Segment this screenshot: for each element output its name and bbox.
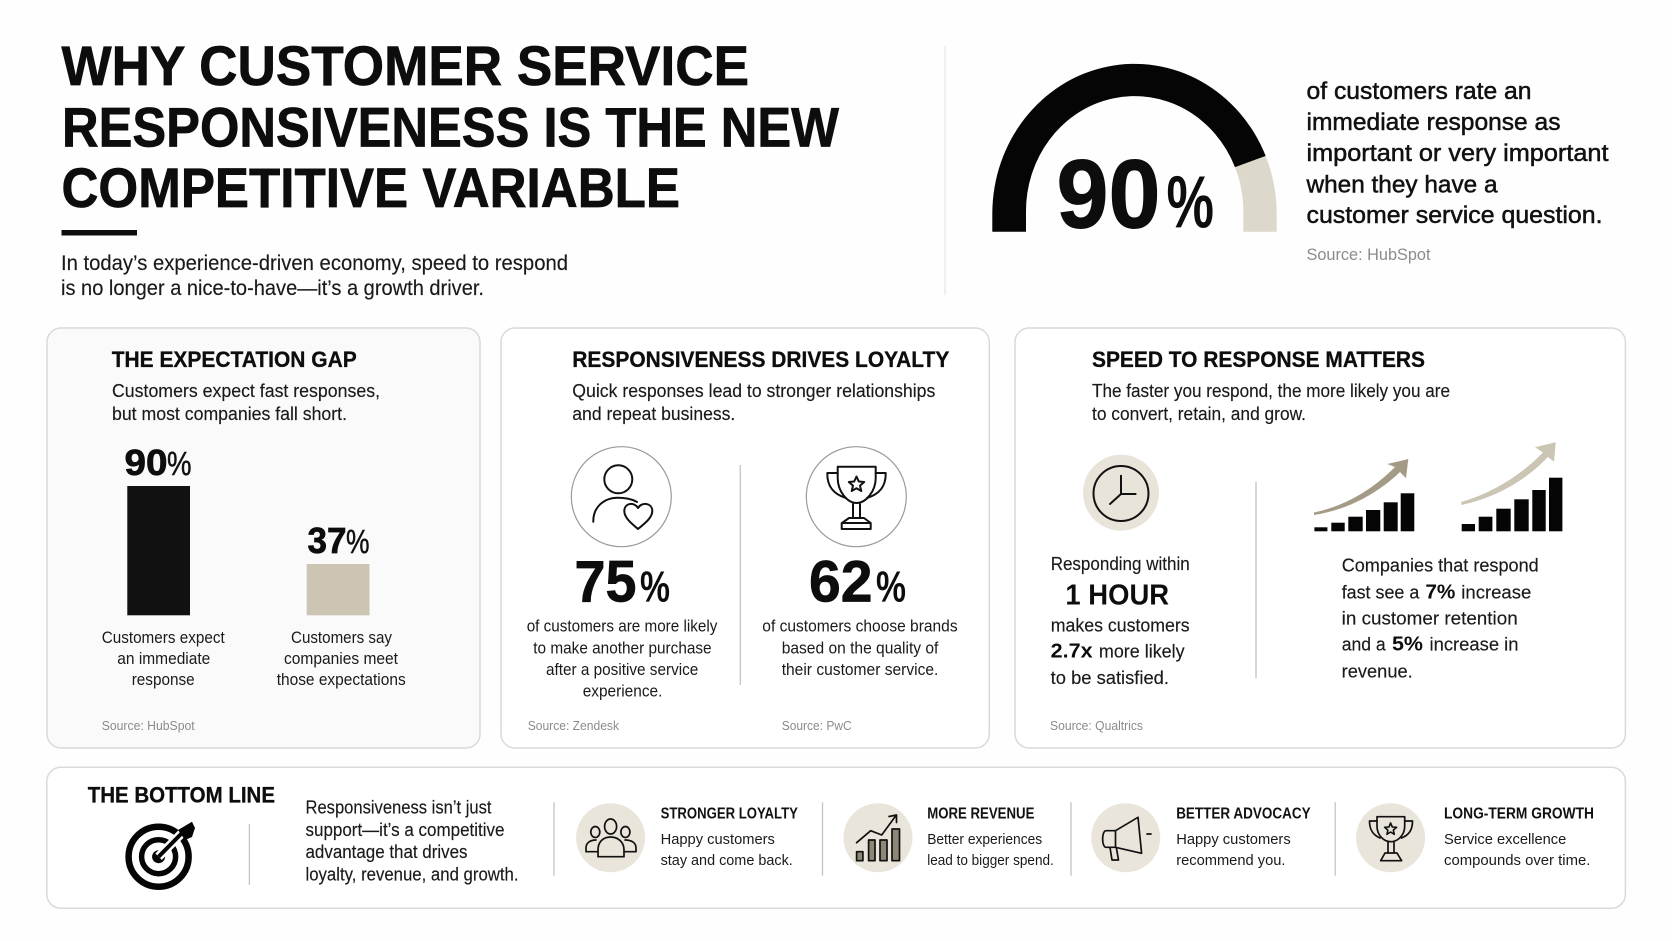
gauge statement: when they have a [1305,172,1498,198]
panel intro: and repeat business. [572,404,735,424]
icon: person with heart [571,447,671,547]
companies statement: increase [1461,582,1531,602]
chart: retention growth bars with arrow [1314,459,1414,531]
chart: revenue growth bars with arrow [1461,442,1562,531]
benefit: stronger loyalty: STRONGER LOYALTY [661,805,798,822]
title: WHY CUSTOMER SERVICE [62,35,749,97]
caption: 62 percent: of customers choose brands [762,618,958,636]
bar: 90 percent: 90 [124,442,168,483]
source: Qualtrics: Source: Qualtrics [1050,718,1143,733]
benefit: long-term growth: Service excellence [1444,831,1566,848]
caption: expect: an immediate [117,650,210,668]
summary text: advantage that drives [306,842,468,862]
icon: rising chart [844,803,912,872]
bar: 90 percent: % [167,445,192,482]
caption: say: companies meet [284,650,398,668]
panel intro: Quick responses lead to stronger relationships [572,381,935,401]
one hour statement [1051,554,1190,688]
benefit: stronger loyalty [576,803,798,872]
title: RESPONSIVENESS IS THE NEW [62,96,840,158]
benefit: better advocacy: Happy customers [1176,831,1291,848]
intro text: is no longer a nice-to-have—it’s a growth driver. [61,277,484,300]
panel intro [1092,381,1450,424]
bar: 37 percent: 37 [308,520,346,561]
icon: small trophy [1356,803,1425,872]
gauge statement: important or very important [1306,140,1609,167]
panel intro: Customers expect fast responses, [112,381,380,401]
caption: 62 percent [762,618,958,679]
stat: 75 percent: % [640,563,670,612]
one hour statement: 2.7x [1051,641,1093,663]
summary text: support—it’s a competitive [306,820,504,840]
caption: 75 percent: of customers are more likely [527,618,718,636]
panel intro: to convert, retain, and grow. [1092,404,1306,424]
summary text: loyalty, revenue, and growth. [306,865,518,885]
source: Zendesk: Source: Zendesk [528,718,619,733]
benefit: long-term growth: LONG-TERM GROWTH [1444,805,1594,822]
caption: 75 percent: experience. [583,683,662,701]
icon: trophy [806,447,906,547]
heading: RESPONSIVENESS DRIVES LOYALTY [572,347,950,372]
one hour statement: 1 HOUR [1065,579,1169,611]
icon: clock [1083,455,1159,531]
panel intro [572,381,935,424]
intro text [61,252,568,300]
gauge statement [1305,78,1609,229]
benefit: better advocacy [1091,803,1311,872]
caption: say: those expectations [277,671,406,689]
bar: 37 percent: % [346,523,370,560]
companies statement: increase in [1430,635,1518,655]
caption: say: Customers say [291,629,393,647]
panel: the expectation gap [47,328,480,748]
companies statement: 5% [1392,634,1423,656]
one hour statement: more likely [1099,642,1185,662]
companies statement: Companies that respond [1342,556,1539,576]
heading: SPEED TO RESPONSE MATTERS [1092,347,1425,372]
benefit: long-term growth [1356,803,1594,872]
summary text: Responsiveness isn’t just [306,797,492,817]
benefit: stronger loyalty: stay and come back. [661,852,793,869]
benefit: stronger loyalty: Happy customers [661,831,775,848]
stat: 75 percent [574,550,670,615]
icon: target with arrow [129,822,195,887]
summary text [306,797,518,885]
benefit: more revenue: lead to bigger spend. [927,852,1054,869]
source: Source: HubSpot [102,718,195,733]
gauge source: Source: HubSpot [1306,245,1431,264]
one hour statement: to be satisfied. [1051,668,1169,688]
companies statement: fast see a [1342,582,1420,602]
companies statement: 7% [1425,581,1456,603]
caption: expect: Customers expect [102,629,225,647]
panel: responsiveness drives loyalty [501,328,989,748]
heading: THE EXPECTATION GAP [112,347,357,372]
caption: expect: response [132,671,195,689]
benefit: long-term growth: compounds over time. [1444,852,1590,869]
icon: people [576,803,645,872]
gauge statement: immediate response as [1306,109,1560,136]
companies statement: in customer retention [1342,608,1518,628]
gauge: 90 percent [992,64,1277,248]
stat: 75 percent: 75 [574,550,636,615]
bar: 90 percent [124,442,192,615]
title underline accent [62,230,137,236]
panel intro: but most companies fall short. [112,404,347,424]
benefit: better advocacy: BETTER ADVOCACY [1176,805,1311,822]
title [62,35,840,219]
panel: speed to response matters [1015,328,1625,748]
heading: THE BOTTOM LINE [88,783,275,808]
intro text: In today’s experience-driven economy, speed to respond [61,252,568,275]
companies statement: and a [1342,635,1387,655]
title: COMPETITIVE VARIABLE [62,157,680,219]
companies statement [1342,556,1539,681]
bar: 37 percent [307,520,370,615]
panel intro [112,381,380,424]
gauge: 90 percent: % [1166,160,1214,244]
one hour statement: Responding within [1051,554,1190,574]
caption: 75 percent: to make another purchase [533,639,712,657]
caption: 62 percent: their customer service. [782,661,938,679]
gauge statement: of customers rate an [1306,78,1532,105]
panel: the bottom line [47,767,1625,908]
caption: 62 percent: based on the quality of [782,639,939,657]
caption: expect [102,629,225,689]
stat: 62 percent [809,550,906,615]
gauge statement: customer service question. [1306,202,1602,229]
benefit: more revenue: MORE REVENUE [927,805,1034,822]
benefit: more revenue: Better experiences [927,831,1042,848]
one hour statement: makes customers [1051,616,1190,636]
caption: 75 percent: after a positive service [546,661,698,679]
companies statement: revenue. [1342,661,1413,681]
icon: megaphone [1091,803,1160,872]
gauge: 90 percent: 90 [1056,140,1160,248]
stat: 62 percent: % [876,563,906,612]
panel intro: The faster you respond, the more likely you are [1092,381,1450,401]
benefit: more revenue [844,803,1054,872]
source: PwC: Source: PwC [782,718,852,733]
stat: 62 percent: 62 [809,550,872,615]
caption: say [277,629,406,689]
benefit: better advocacy: recommend you. [1176,852,1286,869]
caption: 75 percent [527,618,718,701]
